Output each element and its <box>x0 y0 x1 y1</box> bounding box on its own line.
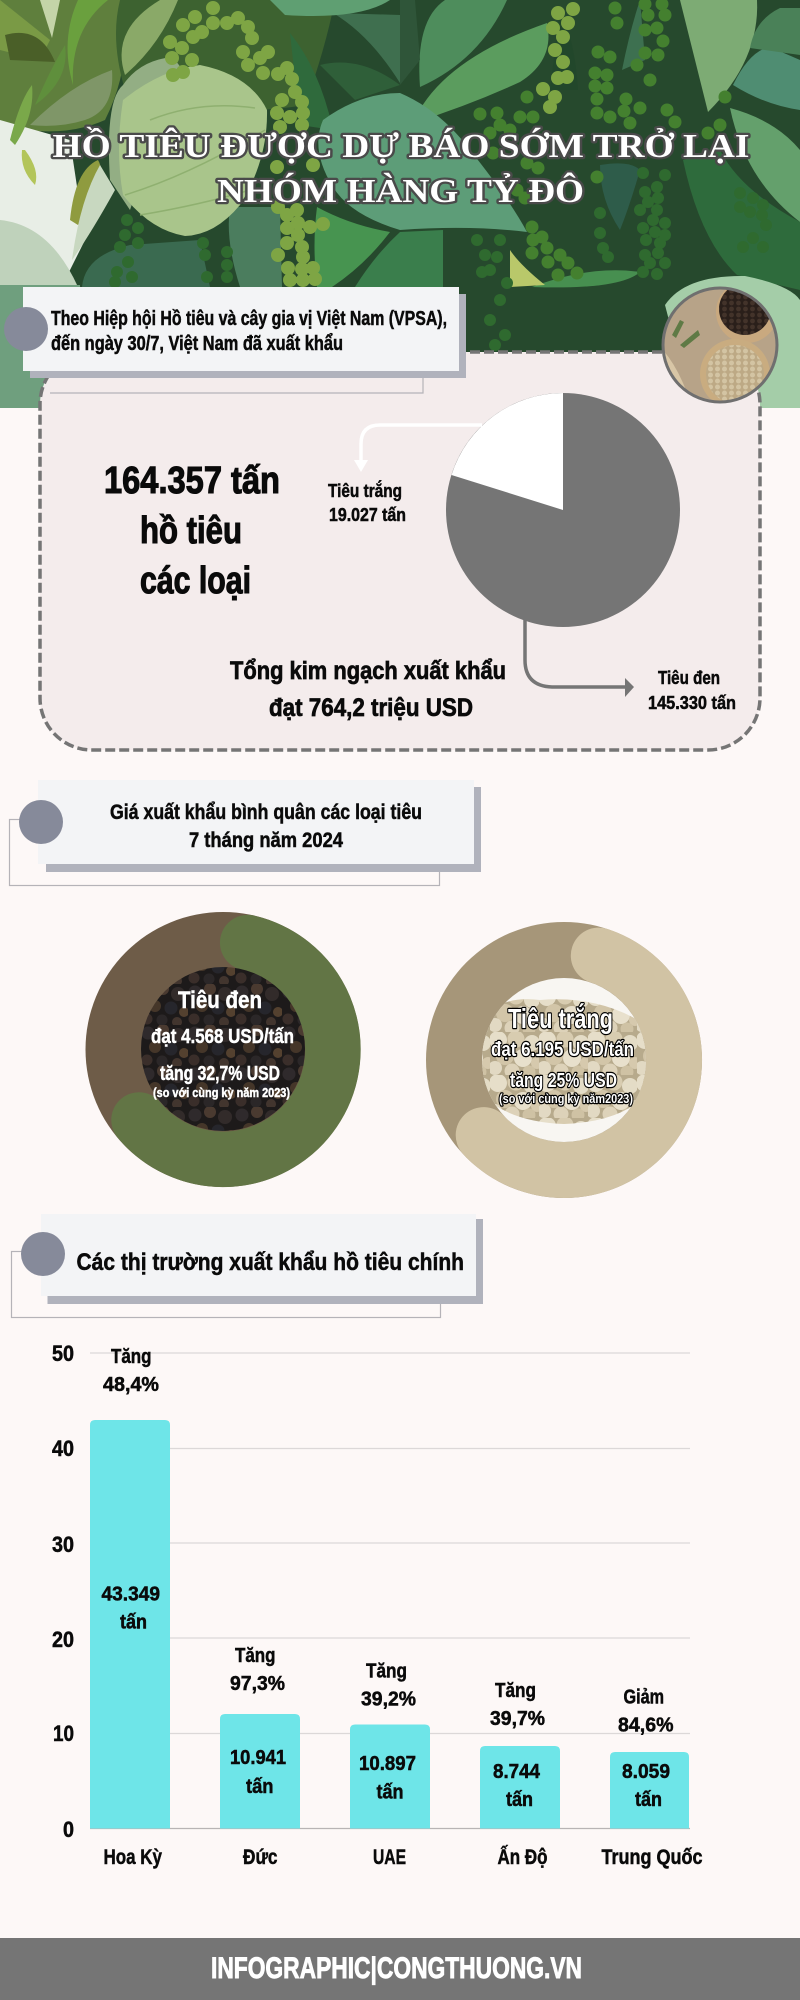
total volume text <box>104 460 280 602</box>
callout: VPSA intro: Theo Hiệp hội Hồ tiêu và cây gia vị Việt Nam (VPSA), <box>51 308 447 330</box>
Đức values <box>230 1645 286 1798</box>
bars <box>90 1420 689 1828</box>
pale front leaf <box>109 58 180 210</box>
UAE values: Tăng <box>366 1660 407 1682</box>
Trung Quốc values: Giảm <box>624 1687 664 1709</box>
Đức values: 97,3% <box>230 1673 285 1695</box>
UAE values <box>359 1660 416 1804</box>
black pepper label: Tiêu đen <box>658 668 720 688</box>
white pepper text: (so với cùng kỳ năm2023) <box>499 1091 633 1106</box>
footer <box>0 1938 800 2000</box>
UAE values: 39,2% <box>361 1689 416 1711</box>
leaves mid and right <box>290 34 330 128</box>
white pepper label <box>328 480 406 525</box>
y axis labels: 20 <box>52 1627 74 1652</box>
y axis labels: 10 <box>53 1721 74 1746</box>
export value <box>230 657 506 722</box>
panel: export volume <box>40 352 760 750</box>
Ấn Độ values <box>490 1680 545 1811</box>
x axis labels: Hoa Kỳ <box>104 1846 162 1869</box>
Trung Quốc values: 84,6% <box>618 1715 674 1737</box>
white pepper label: 19.027 tấn <box>329 505 406 525</box>
black pepper text: tăng 32,7% USD <box>160 1063 280 1085</box>
Hoa Kỳ values: tấn <box>120 1612 147 1634</box>
y axis labels: 0 <box>63 1817 74 1842</box>
heading: average export price <box>10 780 481 886</box>
Đức values: tấn <box>246 1776 274 1798</box>
total volume text: hồ tiêu <box>140 510 242 552</box>
x axis labels <box>104 1846 703 1869</box>
x axis labels: UAE <box>373 1846 406 1869</box>
Trung Quốc values: tấn <box>635 1789 662 1811</box>
title: NHÓM HÀNG TỶ ĐÔ <box>217 172 584 210</box>
donut: black pepper <box>86 912 360 1187</box>
UAE values: 10.897 <box>359 1753 416 1775</box>
Hoa Kỳ values <box>102 1346 160 1634</box>
x axis labels: Đức <box>243 1846 278 1869</box>
black pepper text: đạt 4.568 USD/tấn <box>151 1026 294 1048</box>
Ấn Độ values: 8.744 <box>493 1761 541 1783</box>
white pepper text: tăng 25% USD <box>510 1070 617 1092</box>
arrow: white pepper <box>354 425 482 472</box>
x axis labels: Ấn Độ <box>498 1846 548 1869</box>
Ấn Độ values: tấn <box>506 1789 533 1811</box>
total volume text: các loại <box>140 560 251 602</box>
Đức values: Tăng <box>235 1645 276 1667</box>
Hoa Kỳ values: 43.349 <box>102 1584 160 1606</box>
export value: Tổng kim ngạch xuất khẩu <box>230 657 506 685</box>
Đức values: 10.941 <box>230 1747 286 1769</box>
UAE values: tấn <box>376 1782 404 1804</box>
donut: white pepper <box>426 922 702 1198</box>
Trung Quốc values <box>618 1687 674 1811</box>
y axis labels <box>52 1341 74 1842</box>
berry clusters <box>115 4 766 345</box>
Trung Quốc values: 8.059 <box>622 1761 670 1783</box>
callout: VPSA intro <box>4 287 466 393</box>
black pepper text: Tiêu đen <box>178 987 262 1014</box>
y axis labels: 50 <box>52 1341 74 1366</box>
white pepper text: Tiêu trắng <box>508 1003 613 1034</box>
total volume text: 164.357 tấn <box>104 460 280 502</box>
black pepper text: (so với cùng kỳ năm 2023) <box>153 1085 290 1100</box>
Ấn Độ values: 39,7% <box>490 1708 545 1730</box>
black pepper label <box>648 668 736 713</box>
heading: main export markets: Các thị trường xuất khẩu hồ tiêu chính <box>76 1249 464 1276</box>
x axis labels: Trung Quốc <box>602 1846 703 1869</box>
icon: round photo of pepper bowls <box>663 281 778 409</box>
white pepper text <box>491 1003 634 1106</box>
black pepper text <box>151 987 294 1100</box>
heading: average export price: 7 tháng năm 2024 <box>189 829 343 852</box>
footer: INFOGRAPHIC|CONGTHUONG.VN <box>211 1952 582 1985</box>
Ấn Độ values: Tăng <box>495 1680 536 1702</box>
heading: main export markets <box>12 1214 483 1318</box>
arrow: black pepper <box>525 620 634 697</box>
title: HỒ TIÊU ĐƯỢC DỰ BÁO SỚM TRỞ LẠI <box>52 126 749 165</box>
Hoa Kỳ values: 48,4% <box>103 1374 159 1396</box>
heading: average export price: Giá xuất khẩu bình quân các loại tiêu <box>110 801 422 824</box>
y axis labels: 30 <box>52 1532 74 1557</box>
pie chart <box>446 393 680 627</box>
white pepper label: Tiêu trắng <box>328 480 402 501</box>
black pepper label: 145.330 tấn <box>648 693 736 713</box>
white pepper text: đạt 6.195 USD/tấn <box>491 1039 634 1061</box>
Hoa Kỳ values: Tăng <box>111 1346 152 1368</box>
bar chart: export markets <box>52 1341 703 1869</box>
hero photo: pepper vines <box>0 0 800 408</box>
callout: VPSA intro: đến ngày 30/7, Việt Nam đã xuất khẩu <box>51 333 343 355</box>
y axis labels: 40 <box>52 1436 74 1461</box>
export value: đạt 764,2 triệu USD <box>269 694 473 722</box>
title <box>52 126 749 210</box>
